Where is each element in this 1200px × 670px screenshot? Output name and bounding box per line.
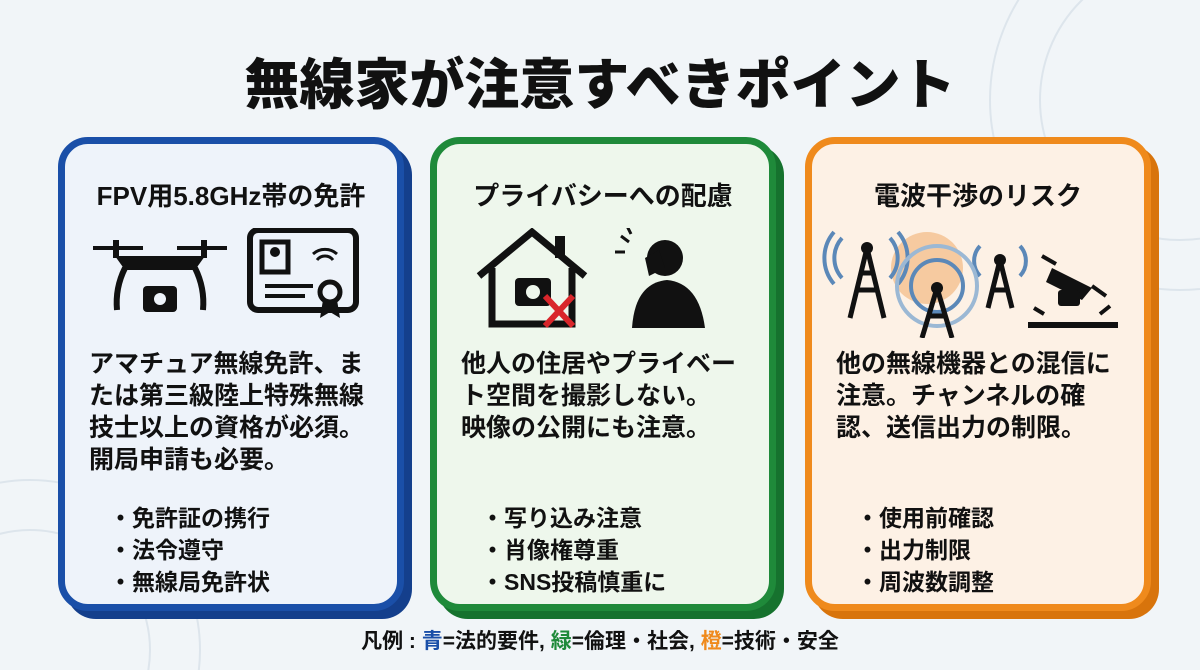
- text: interference body: 注意。チャンネルの確: [836, 382, 1085, 410]
- heading: privacy: プライバシーへの配慮: [473, 181, 733, 211]
- panel: license: [58, 137, 404, 611]
- text: license body: たは第三級陸上特殊無線: [89, 382, 364, 410]
- bullets: interference: ・使用前確認: [856, 505, 994, 531]
- panel: privacy: [430, 137, 776, 611]
- text: privacy body: 映像の公開にも注意。: [461, 414, 711, 442]
- text: interference body: 他の無線機器との混信に: [836, 350, 1111, 378]
- bullets: interference: ・出力制限: [856, 537, 971, 563]
- bullets: interference: [856, 505, 994, 595]
- text: interference body: [836, 350, 1111, 442]
- heading: license: FPV用5.8GHz帯の免許: [97, 181, 365, 211]
- bullets: privacy: [481, 505, 666, 595]
- icons: house camera and person: [476, 228, 705, 328]
- bullets: privacy: ・写り込み注意: [481, 505, 642, 531]
- text: privacy body: [461, 350, 736, 442]
- panel: interference: [805, 137, 1151, 611]
- bullets: privacy: ・肖像権尊重: [481, 537, 619, 563]
- text: license body: [89, 350, 364, 474]
- text: privacy body: ト空間を撮影しない。: [461, 382, 711, 410]
- bullets: privacy: ・SNS投稿慎重に: [481, 569, 666, 595]
- text: license body: 開局申請も必要。: [89, 446, 289, 474]
- bullets: license: [109, 505, 270, 595]
- icons: drone and license: [93, 228, 359, 318]
- bullets: interference: ・周波数調整: [856, 569, 994, 595]
- text: license body: 技士以上の資格が必須。: [89, 414, 364, 442]
- title: 無線家が注意すべきポイント: [244, 54, 956, 116]
- bullets: license: ・免許証の携行: [109, 505, 270, 531]
- text: license body: アマチュア無線免許、ま: [89, 350, 364, 378]
- bullets: license: ・無線局免許状: [109, 569, 270, 595]
- heading: interference: 電波干渉のリスク: [874, 181, 1082, 211]
- text: interference body: 認、送信出力の制限。: [836, 414, 1086, 442]
- text: privacy body: 他人の住居やプライベー: [461, 350, 736, 378]
- legend: 凡例 : 青=法的要件, 緑=倫理・社会, 橙=技術・安全: [361, 630, 839, 653]
- icons: towers and drone: [822, 230, 1118, 338]
- bullets: license: ・法令遵守: [109, 537, 224, 563]
